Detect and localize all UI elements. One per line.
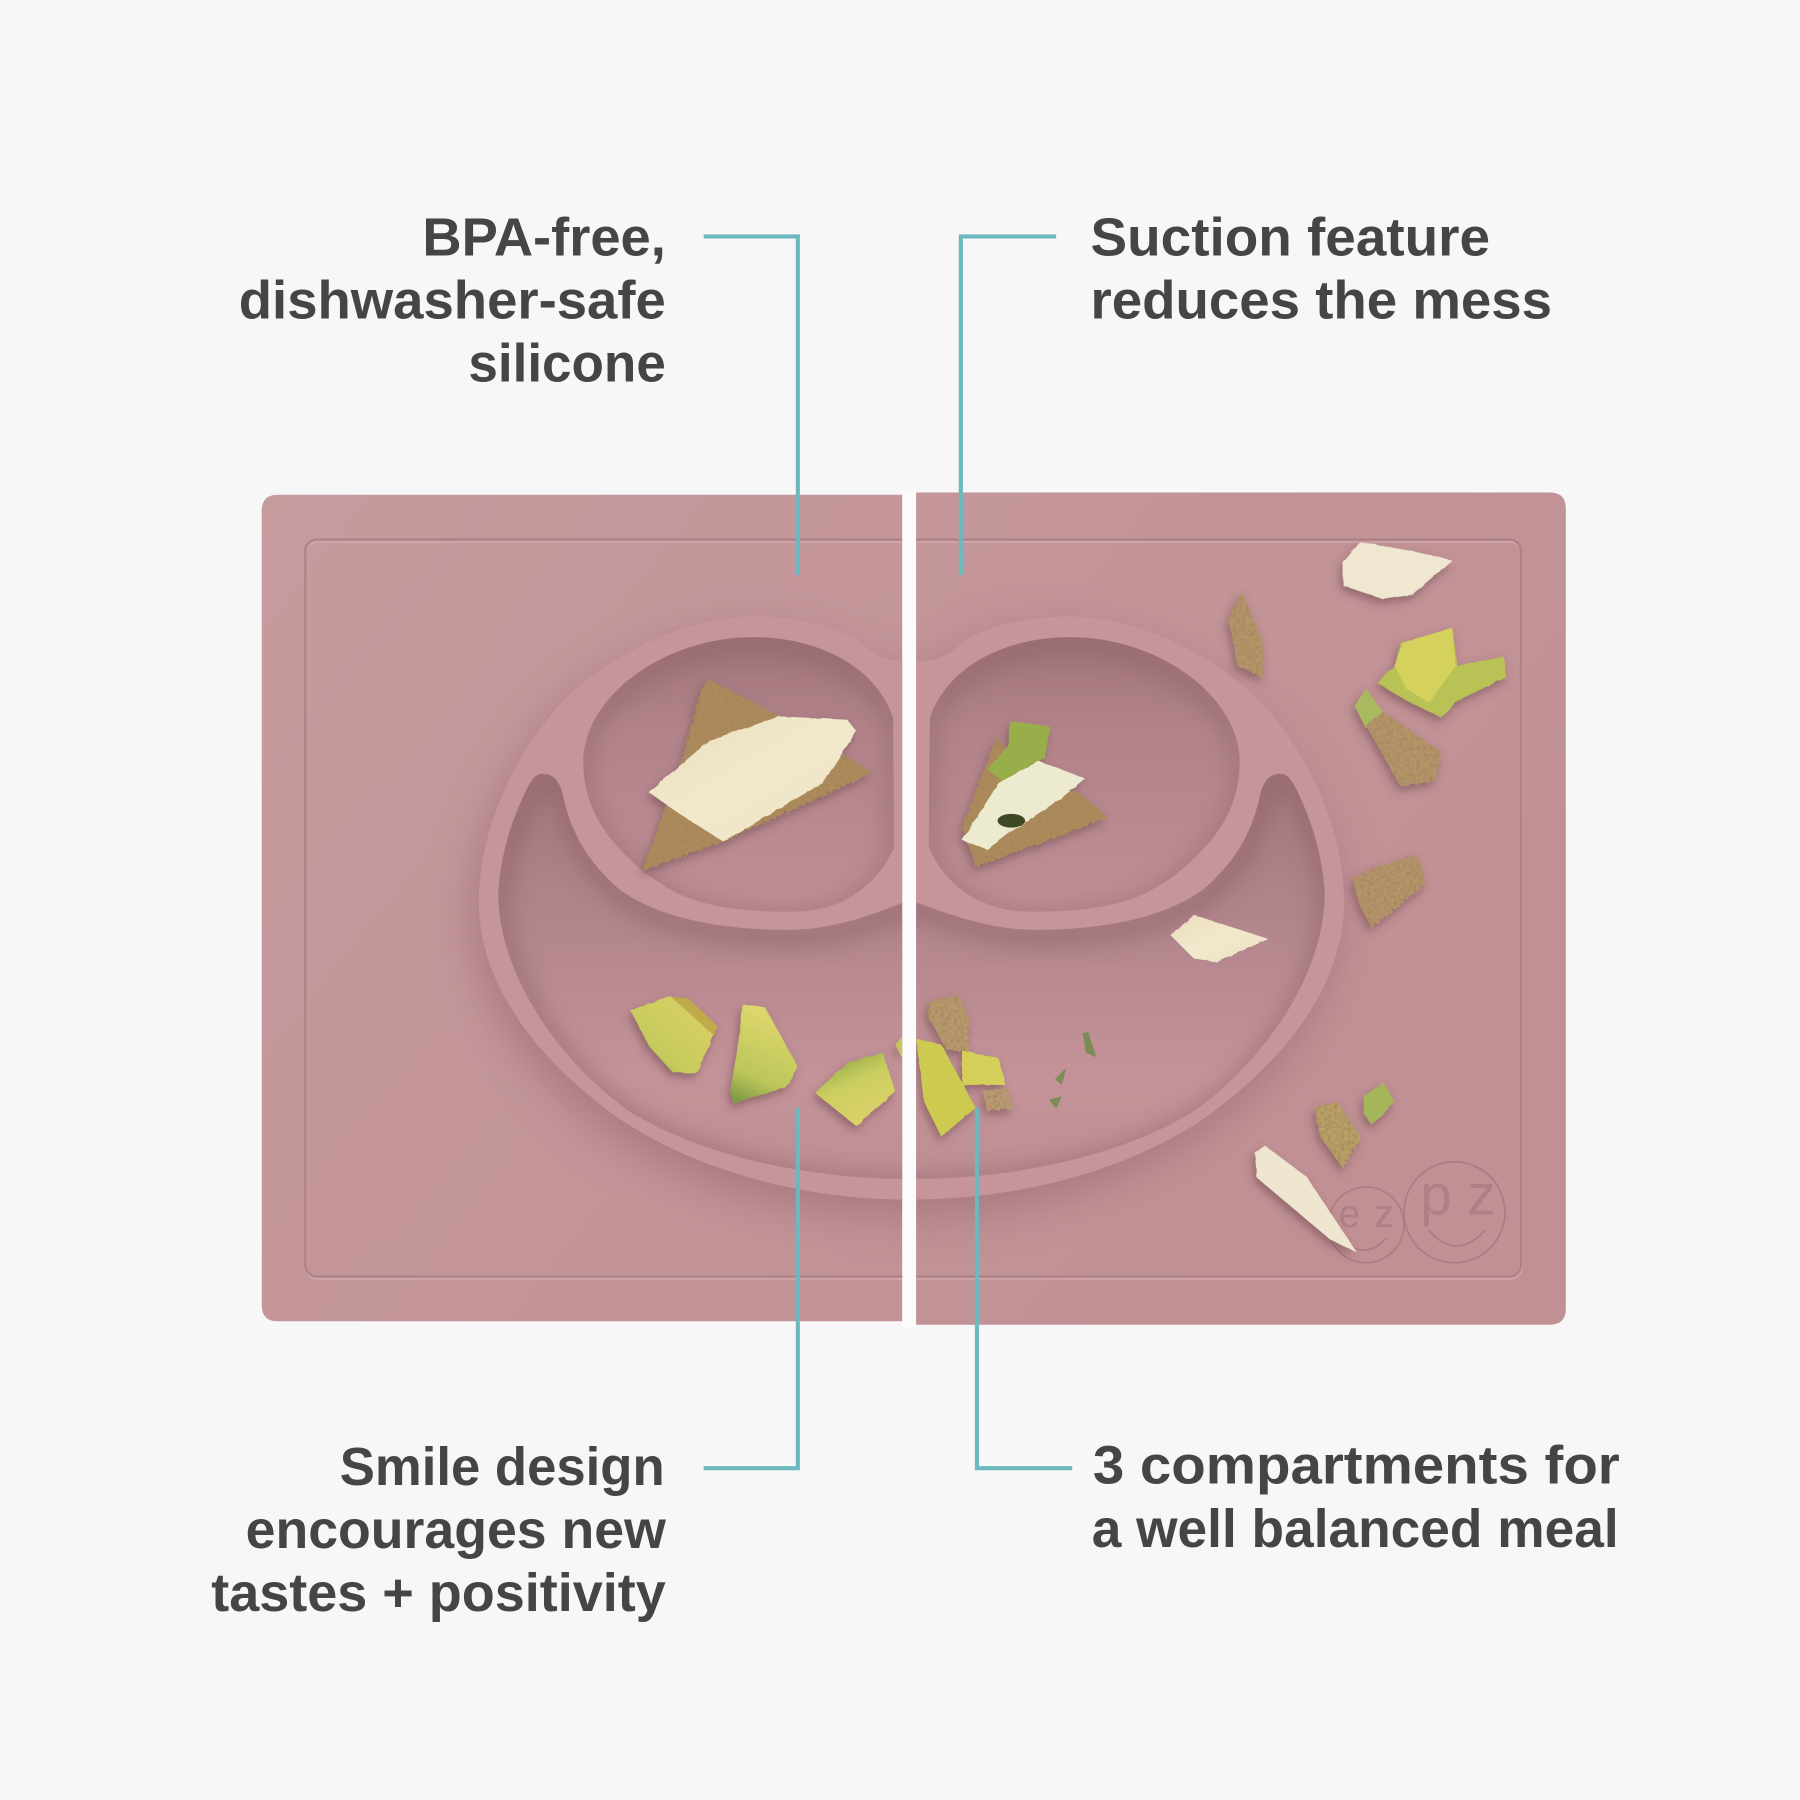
text: BPA-free xyxy=(239,207,666,394)
food: crumbs and avocado right of gap xyxy=(916,995,1012,1136)
text: smile design: Smile design xyxy=(340,1437,665,1497)
food: scattered pieces on mat xyxy=(1228,542,1506,1252)
panel: silicone suction mat xyxy=(262,491,1566,1327)
food: avocado chunks in smile xyxy=(630,996,902,1126)
text: BPA-free: BPA-free, xyxy=(422,207,666,267)
text: suction: reduces the mess xyxy=(1091,271,1552,331)
left eye compartment xyxy=(583,637,894,919)
leader: BPA-free xyxy=(704,236,798,575)
ezpz embossed logo: p xyxy=(1420,1164,1452,1228)
text: compartments: 3 compartments for xyxy=(1093,1436,1620,1496)
food: right eye toast, avocado and chicken xyxy=(962,721,1108,867)
text: smile design: tastes + positivity xyxy=(211,1563,666,1623)
text: smile design: encourages new xyxy=(246,1500,667,1560)
text: suction: Suction feature xyxy=(1091,207,1490,267)
leader: compartments xyxy=(977,1108,1072,1468)
ezpz embossed logo: e xyxy=(1339,1193,1360,1236)
smile compartment xyxy=(498,774,1327,1186)
leader: suction xyxy=(961,236,1056,575)
food: green flecks xyxy=(1049,1032,1096,1109)
mat base xyxy=(262,492,1566,1325)
food: left eye toast and chicken xyxy=(643,678,874,870)
text: compartments xyxy=(1092,1436,1620,1559)
ezpz embossed logo: z xyxy=(1467,1164,1496,1228)
text: smile design xyxy=(211,1437,667,1623)
ezpz embossed logo xyxy=(1328,1162,1505,1263)
text: BPA-free: silicone xyxy=(468,334,666,394)
text: suction xyxy=(1091,207,1552,331)
leader: smile design xyxy=(704,1108,798,1468)
food: chicken in smile xyxy=(1171,915,1268,962)
mat inner groove xyxy=(305,540,1522,1279)
text: BPA-free: dishwasher-safe xyxy=(239,271,666,331)
ezpz embossed logo: z xyxy=(1374,1193,1394,1236)
text: compartments: a well balanced meal xyxy=(1092,1499,1619,1559)
plate rim xyxy=(479,616,1344,1200)
plate drop shadow xyxy=(472,633,1337,1216)
white centre split xyxy=(902,491,916,1327)
right eye compartment xyxy=(929,637,1240,919)
